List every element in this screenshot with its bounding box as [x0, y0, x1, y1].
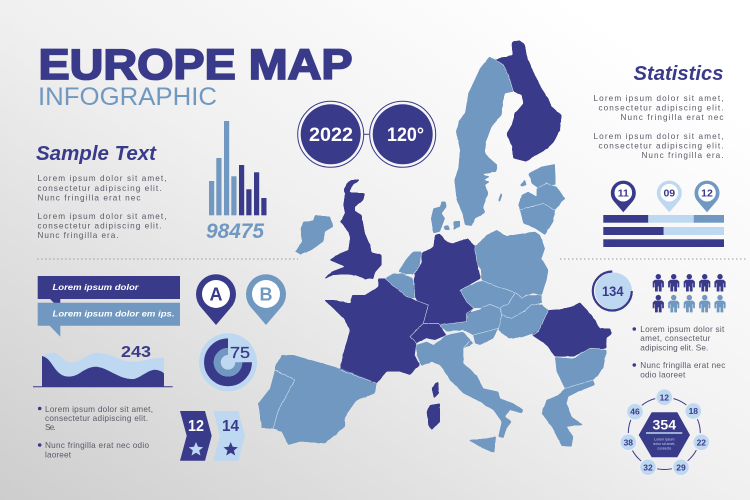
finland	[492, 40, 562, 162]
bullet list: left	[38, 405, 153, 460]
hexagon cycle diagram: consecte	[657, 447, 671, 451]
belgium	[385, 273, 415, 298]
map of europe	[258, 40, 612, 453]
year and degree circles: 2022	[309, 125, 353, 146]
chevron badges: 12	[188, 418, 204, 435]
chevron badges	[180, 411, 245, 461]
map pins A and B: B	[260, 284, 272, 304]
panel: statistics: Lorem ipsum dolor sit amet,	[594, 94, 724, 103]
hexagon cycle diagram: 12	[660, 392, 669, 402]
slovenia	[473, 328, 498, 345]
italy	[417, 332, 523, 438]
romania	[532, 302, 612, 357]
bullet list: right: Nunc fringilla erat nec	[640, 361, 725, 370]
progress ring 134: 134	[602, 283, 624, 299]
sardinia and corsica	[427, 382, 440, 430]
bullet list: right: adipiscing elit. Se.	[640, 344, 708, 352]
hexagon cycle diagram: 46	[630, 407, 640, 417]
bullet list: right: Lorem ipsum dolor sit	[640, 325, 725, 334]
panel: sample text: consectetur adipiscing elit.	[38, 222, 162, 230]
year and degree circles	[298, 101, 436, 167]
panel: sample text: Lorem ipsum dolor sit amet,	[38, 212, 166, 221]
bullet list: left: consectetur adipiscing elit.	[45, 414, 148, 423]
panel: statistics: Statistics	[634, 63, 724, 85]
panel: statistics	[594, 63, 724, 160]
portugal	[258, 370, 295, 428]
panel: sample text: Nunc fringilla erat nec	[38, 194, 140, 202]
title: EUROPE MAP	[38, 41, 352, 89]
czechia	[460, 281, 515, 308]
map pins A and B	[196, 274, 286, 325]
hexagon cycle diagram: 29	[676, 462, 686, 472]
panel: sample text: Sample Text	[36, 143, 157, 165]
switzerland	[410, 323, 447, 343]
people pictogram	[653, 274, 726, 312]
progress ring 134	[593, 272, 632, 310]
donut chart: 75	[230, 345, 250, 362]
hexagon cycle diagram: dolor sit amet,	[653, 442, 675, 446]
bullet list: right: odio laoreet	[640, 370, 686, 380]
panel: statistics: Nunc fringilla era.	[642, 151, 724, 160]
bar chart	[206, 121, 266, 243]
hexagon cycle diagram: 38	[624, 437, 633, 447]
bar chart: 98475	[206, 220, 264, 243]
panel: sample text: consectetur adipiscing elit.	[38, 184, 162, 193]
bullet list: left: Se.	[45, 423, 56, 432]
area chart: 243	[121, 344, 151, 361]
netherlands	[398, 252, 422, 275]
sicily	[468, 437, 496, 453]
sweden	[454, 57, 513, 226]
donut chart	[199, 333, 257, 391]
denmark	[431, 202, 460, 233]
ireland	[295, 215, 333, 254]
bullet list: left: laoreet	[45, 450, 72, 460]
title: INFOGRAPHIC	[38, 83, 217, 111]
hexagon cycle diagram: 22	[697, 437, 706, 447]
ribbon labels	[38, 276, 180, 337]
poland	[475, 230, 548, 298]
panel: sample text	[36, 143, 166, 240]
title	[38, 41, 352, 111]
germany	[413, 233, 481, 325]
austria	[439, 304, 502, 335]
panel: statistics: consectetur adipiscing elit.	[598, 142, 724, 150]
spain	[273, 355, 377, 445]
hexagon cycle diagram: 18	[689, 406, 698, 416]
hexagon cycle diagram	[620, 389, 710, 476]
baltic states	[498, 164, 565, 235]
hexagon cycle diagram: 354	[653, 416, 676, 432]
greece	[542, 380, 595, 447]
panel: statistics: Nunc fringilla erat nec	[620, 113, 724, 122]
ribbon labels: Lorem ipsum dolor	[52, 283, 140, 292]
pins and stacked bars: 11	[618, 188, 629, 200]
united kingdom	[323, 179, 382, 279]
year and degree circles: 120°	[387, 125, 424, 146]
ribbon labels: Lorem ipsum dolor em ips.	[52, 310, 174, 318]
panel: statistics: consectetur adipiscing elit.	[598, 104, 724, 112]
bullet list: left: Lorem ipsum dolor sit amet,	[45, 405, 153, 414]
map pins A and B: A	[210, 284, 222, 304]
panel: statistics: Lorem ipsum dolor sit amet,	[594, 132, 724, 141]
area chart	[33, 344, 173, 387]
hexagon cycle diagram: Lorem ipsum	[654, 438, 674, 442]
bullet list: left: Nunc fringilla erat nec odio	[45, 441, 149, 450]
panel: sample text: Nunc fringilla era.	[38, 231, 118, 240]
bullet list: right	[632, 325, 725, 380]
pins and stacked bars: 09	[663, 188, 675, 200]
pins and stacked bars: 12	[701, 188, 713, 200]
pins and stacked bars	[603, 181, 724, 247]
bullet list: right: amet, consectetur	[640, 334, 711, 343]
hexagon cycle diagram: 32	[643, 462, 653, 472]
panel: sample text: Lorem ipsum dolor sit amet,	[38, 174, 166, 183]
slovakia	[500, 293, 542, 318]
france	[324, 278, 428, 383]
chevron badges: 14	[222, 418, 239, 435]
hungary	[498, 304, 548, 338]
bulgaria	[555, 348, 607, 388]
